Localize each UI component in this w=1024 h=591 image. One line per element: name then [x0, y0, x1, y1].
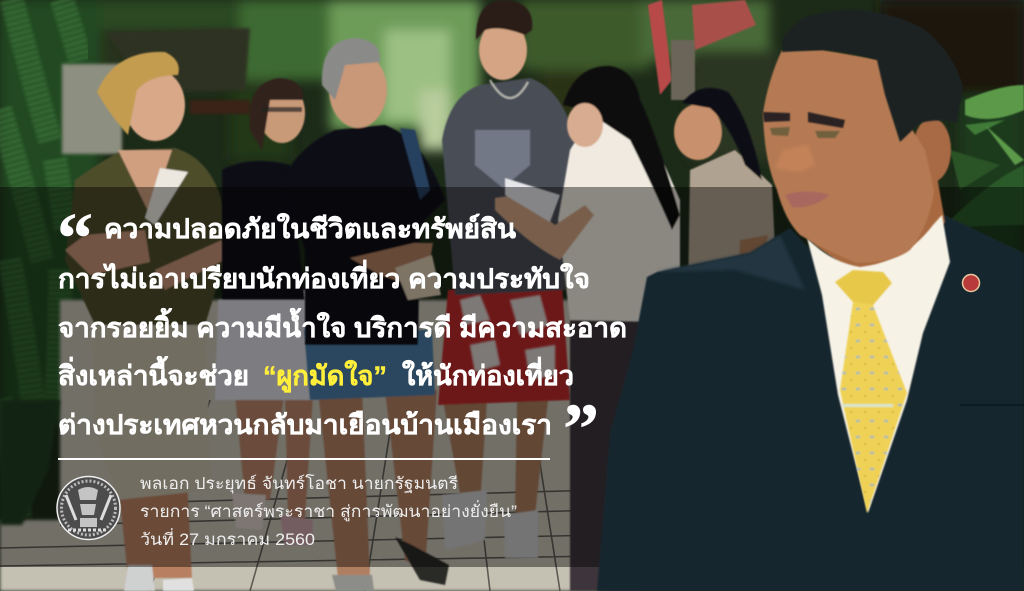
- foliage background: [0, 0, 1024, 420]
- jacket: [597, 213, 1024, 591]
- low plants at left: [0, 400, 60, 525]
- hair: [782, 10, 963, 142]
- tourist: young man: [438, 0, 578, 558]
- eyes: [770, 127, 840, 138]
- quote line 4 end: ให้นักท่องเที่ยว: [402, 356, 574, 391]
- quote line 1: ความปลอดภัยในชีวิตและทรัพย์สิน: [104, 213, 517, 244]
- quote line 5: ต่างประเทศหวนกลับมาเยือนบ้านเมืองเรา: [58, 410, 552, 440]
- pocket: [960, 404, 1024, 406]
- quote line 2: การไม่เอาเปรียบนักท่องเที่ยว ความประทับใจ: [58, 259, 590, 294]
- red hanging decoration: [648, 0, 672, 95]
- eyebrows: [763, 112, 845, 128]
- fern fronds: [0, 0, 80, 520]
- hut roof: [105, 28, 250, 92]
- attribution text: [140, 474, 517, 549]
- jacket highlight: [657, 235, 805, 290]
- divider rule: [58, 458, 550, 460]
- closing quote mark: ”: [563, 389, 599, 469]
- staff: woman in white: [495, 66, 680, 591]
- neck: [790, 165, 945, 270]
- wood post: [190, 100, 250, 114]
- staff: woman in beige: [674, 88, 775, 300]
- tourist: woman with glasses: [215, 78, 316, 545]
- red shorts floral print: [460, 295, 555, 380]
- pavement: [0, 300, 600, 591]
- mouth: [785, 192, 830, 208]
- tie: [835, 270, 907, 513]
- red roof: [692, 0, 756, 50]
- face: [763, 50, 934, 263]
- highlighted phrase: “ผูกมัดใจ”: [263, 360, 387, 393]
- quote line 4 start: สิ่งเหล่านี้จะช่วย: [58, 355, 249, 391]
- lapel pin: [962, 274, 980, 292]
- tourist: grey-haired man: [282, 38, 449, 591]
- opening quote mark: “: [57, 198, 93, 278]
- tree trunk: [671, 40, 695, 100]
- portrait of prime minister: [597, 10, 1024, 591]
- government seal icon: [57, 476, 120, 540]
- nose: [775, 145, 815, 172]
- wall panel: [62, 64, 122, 154]
- ear: [913, 118, 951, 182]
- speaker name: พลเอก ประยุทธ์ จันทร์โอชา นายกรัฐมนตรี: [140, 474, 458, 494]
- quote line 3: จากรอยยิ้ม ความมีน้ำใจ บริการดี มีความสะอาด: [58, 307, 627, 343]
- tourist: blonde woman: [65, 52, 228, 591]
- shirt: [807, 215, 950, 513]
- dark overlay band: [0, 187, 1024, 567]
- programme name: รายการ “ศาสตร์พระราชา สู่การพัฒนาอย่างยั่งยืน”: [140, 500, 517, 522]
- date: วันที่ 27 มกราคม 2560: [140, 528, 315, 549]
- right leaves: [940, 85, 1024, 230]
- quote text block: [57, 198, 627, 469]
